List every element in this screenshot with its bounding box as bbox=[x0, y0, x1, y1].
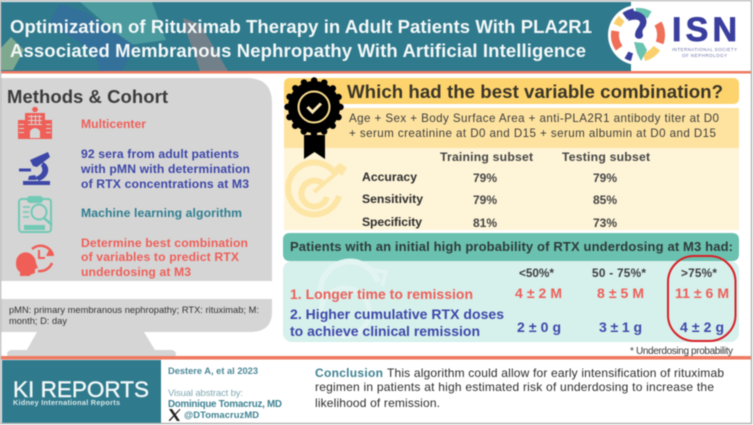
footer: citation: Visual abstract by: bbox=[168, 388, 243, 399]
footer: KI Reports logo: KI REPORTS bbox=[13, 377, 149, 402]
highlight: red outline bbox=[668, 256, 736, 341]
icon: head with clock bbox=[16, 246, 54, 276]
text: determine best combination: of variables to predict RTX bbox=[81, 250, 240, 264]
abbreviations panel bbox=[1, 299, 272, 358]
row: cumulative doses: to achieve clinical remission bbox=[290, 323, 480, 339]
heading: methods and cohort: Methods & Cohort bbox=[7, 86, 168, 107]
row: cumulative doses bbox=[290, 306, 724, 339]
row: cumulative doses: 2. Higher cumulative RTX doses bbox=[290, 306, 504, 322]
icon: faded cycle bbox=[321, 262, 386, 336]
column headers bbox=[519, 266, 717, 280]
row: time to remission: 11 ± 6 M bbox=[675, 285, 729, 301]
icon: target bbox=[288, 162, 347, 214]
table: model performance: 79% bbox=[593, 171, 617, 185]
text: machine learning: Machine learning algorithm bbox=[81, 206, 242, 220]
footer: citation: @DTomacruzMD bbox=[184, 409, 259, 420]
ISN logo: INTERNATIONAL SOCIETY bbox=[672, 47, 737, 52]
text: sera: with pMN with determination bbox=[80, 162, 250, 176]
footer: citation bbox=[168, 366, 282, 421]
text: variables: + serum creatinine at D0 and D15 + serum albumin at D0 and D15 bbox=[349, 127, 716, 140]
panel: best variable combination bbox=[284, 78, 739, 230]
column headers: <50%* bbox=[519, 266, 554, 280]
panel: underdosing outcomes bbox=[283, 233, 739, 357]
text: determine best combination: underdosing at M3 bbox=[81, 265, 191, 279]
conclusion bbox=[315, 366, 724, 410]
text: sera bbox=[80, 147, 250, 191]
conclusion: Conclusion bbox=[315, 366, 383, 380]
table: model performance: Specificity bbox=[362, 215, 422, 229]
table: model performance: 73% bbox=[593, 216, 617, 230]
table: model performance: Sensitivity bbox=[362, 192, 423, 206]
table: model performance: 79% bbox=[473, 171, 497, 185]
table: model performance: 85% bbox=[593, 193, 617, 207]
row: cumulative doses: 4 ± 2 g bbox=[680, 319, 724, 335]
row: time to remission: 4 ± 2 M bbox=[515, 285, 562, 301]
text: sera: of RTX concentrations at M3 bbox=[81, 177, 249, 191]
footer: KI Reports logo: Kidney International Reports bbox=[13, 398, 120, 407]
conclusion: likelihood of remission. bbox=[315, 396, 440, 410]
conclusion: regimen in patients at high estimated risk of underdosing to increase the bbox=[315, 380, 714, 394]
row: time to remission: 8 ± 5 M bbox=[597, 285, 644, 301]
row: cumulative doses: 3 ± 1 g bbox=[599, 319, 642, 335]
column headers: 50 - 75%* bbox=[592, 266, 646, 280]
header underline bbox=[1, 71, 751, 74]
table: model performance: Accuracy bbox=[362, 170, 417, 184]
text: determine best combination: Determine best combination bbox=[81, 236, 248, 250]
text: abbreviations: month; D: day bbox=[9, 316, 67, 326]
icon: clipboard search bbox=[19, 197, 52, 232]
footer: KI Reports logo bbox=[2, 360, 161, 423]
heading: patients with high probability: Patients with an initial high probability of RTX underdosing at M3 had: bbox=[290, 239, 733, 254]
footer: citation: Destere A, et al 2023 bbox=[168, 366, 258, 376]
text: abbreviations: pMN: primary membranous nephropathy; RTX: rituximab; M: bbox=[9, 305, 259, 315]
title: Associated Membranous Nephropathy With Artificial Intelligence bbox=[10, 40, 586, 61]
icon: X logo bbox=[168, 409, 180, 421]
table: model performance: 79% bbox=[473, 193, 497, 207]
header banner bbox=[1, 2, 631, 71]
text: variables bbox=[349, 112, 719, 140]
panel: methods and cohort monitor bbox=[1, 78, 272, 281]
heading: best combination: Which had the best variable combination? bbox=[347, 81, 723, 102]
column headers: >75%* bbox=[681, 266, 717, 280]
ISN wordmark: ISN bbox=[672, 11, 737, 49]
text: abbreviations bbox=[9, 305, 259, 326]
icon: microscope bbox=[19, 152, 50, 185]
conclusion: This algorithm could allow for early intensification of rituximab bbox=[387, 366, 724, 380]
icon: hospital bbox=[18, 107, 52, 139]
footnote: * Underdosing probability bbox=[630, 346, 733, 357]
text: variables: Age + Sex + Body Surface Area + anti-PLA2R1 antibody titer at D0 bbox=[349, 112, 719, 125]
text: multicenter: Multicenter bbox=[81, 117, 146, 131]
icon: award rosette bbox=[288, 80, 340, 159]
text: sera: 92 sera from adult patients bbox=[81, 147, 239, 161]
ISN logo bbox=[608, 5, 737, 65]
ISN logo: OF NEPHROLOGY bbox=[682, 53, 727, 58]
table: model performance: 81% bbox=[473, 216, 497, 230]
table: model performance bbox=[362, 150, 650, 230]
row: time to remission: 1. Longer time to remission bbox=[290, 286, 473, 302]
table: model performance: Testing subset bbox=[562, 150, 650, 164]
title: Optimization of Rituximab Therapy in Adult Patients With PLA2R1 bbox=[10, 16, 592, 37]
footer divider bbox=[1, 356, 751, 360]
table: model performance: Training subset bbox=[440, 150, 533, 164]
text: determine best combination bbox=[81, 236, 248, 279]
footer: citation: Dominique Tomacruz, MD bbox=[168, 399, 282, 410]
row: cumulative doses: 2 ± 0 g bbox=[517, 319, 561, 335]
row: time to remission bbox=[290, 285, 729, 302]
title bbox=[10, 16, 592, 61]
